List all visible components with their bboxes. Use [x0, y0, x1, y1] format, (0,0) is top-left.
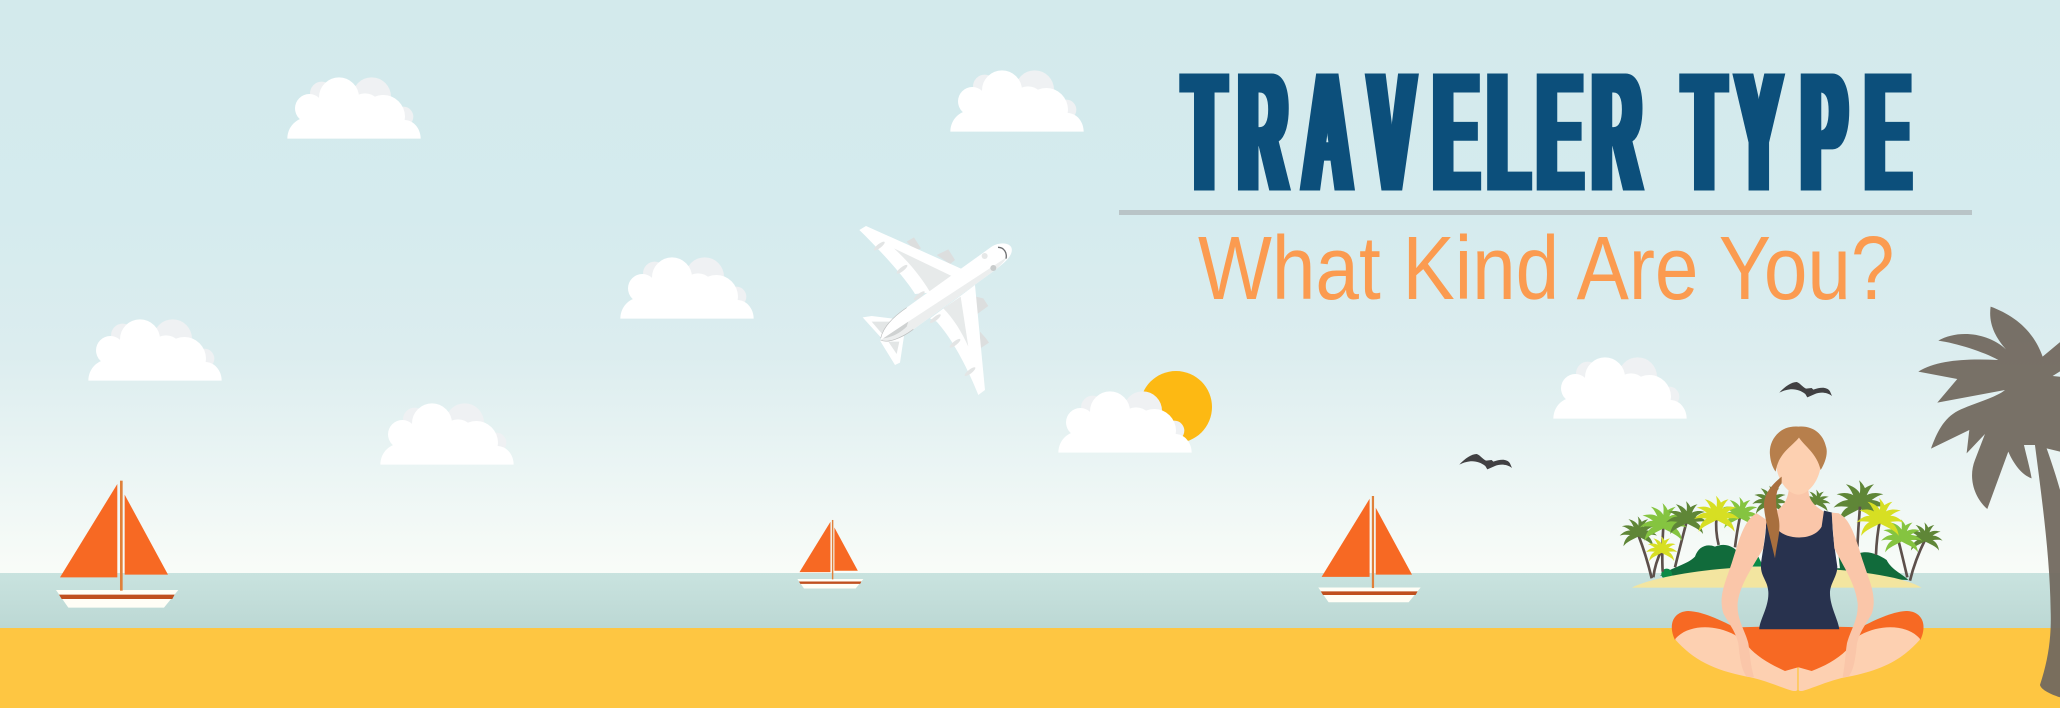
- tank top: [1759, 511, 1839, 629]
- sun: [1140, 371, 1212, 443]
- shorts cuffs: [1672, 611, 1740, 640]
- island sand: [1632, 567, 1922, 588]
- tail: [863, 316, 893, 338]
- cloud 7: [1553, 357, 1687, 419]
- cloud 5: [380, 403, 514, 465]
- cloud 2: [950, 70, 1084, 132]
- back palms: [1752, 480, 1886, 523]
- legs: [1675, 627, 1797, 691]
- subtitle: What Kind Are You?: [1198, 218, 1894, 318]
- trunks: [1638, 507, 1925, 581]
- title: TRAVELER TYPE: [1184, 38, 1910, 227]
- cloud 1: [287, 77, 421, 139]
- right arm: [1832, 513, 1874, 677]
- rear wing engines shadows: [907, 237, 989, 349]
- ponytail: [1764, 477, 1782, 558]
- tropical island: [1620, 480, 1943, 588]
- palm crowns: [1620, 516, 1657, 547]
- cloud 4: [88, 319, 222, 381]
- divider line: [1119, 210, 1972, 215]
- sand band: [0, 628, 2060, 708]
- hair: [1770, 426, 1827, 472]
- wings: [859, 226, 963, 294]
- sailboat left: [56, 481, 178, 608]
- shorts: [1742, 626, 1855, 671]
- bird left: [1459, 454, 1512, 469]
- cloud 3: [620, 257, 754, 319]
- fuselage: [881, 243, 1012, 341]
- bird right: [1779, 382, 1832, 397]
- sea band: [0, 573, 2060, 629]
- sailboat right: [1318, 496, 1421, 602]
- large palm tree silhouette: [1918, 307, 2060, 700]
- hills: [1660, 545, 1908, 580]
- engines: [873, 240, 976, 377]
- face: [1776, 438, 1821, 495]
- left arm: [1722, 513, 1767, 677]
- sailboat middle: [797, 520, 863, 589]
- neck and chest: [1766, 487, 1824, 547]
- woman meditating: [1672, 426, 1924, 691]
- airplane: [859, 226, 1012, 395]
- cloud 6 in front of sun: [1058, 391, 1192, 453]
